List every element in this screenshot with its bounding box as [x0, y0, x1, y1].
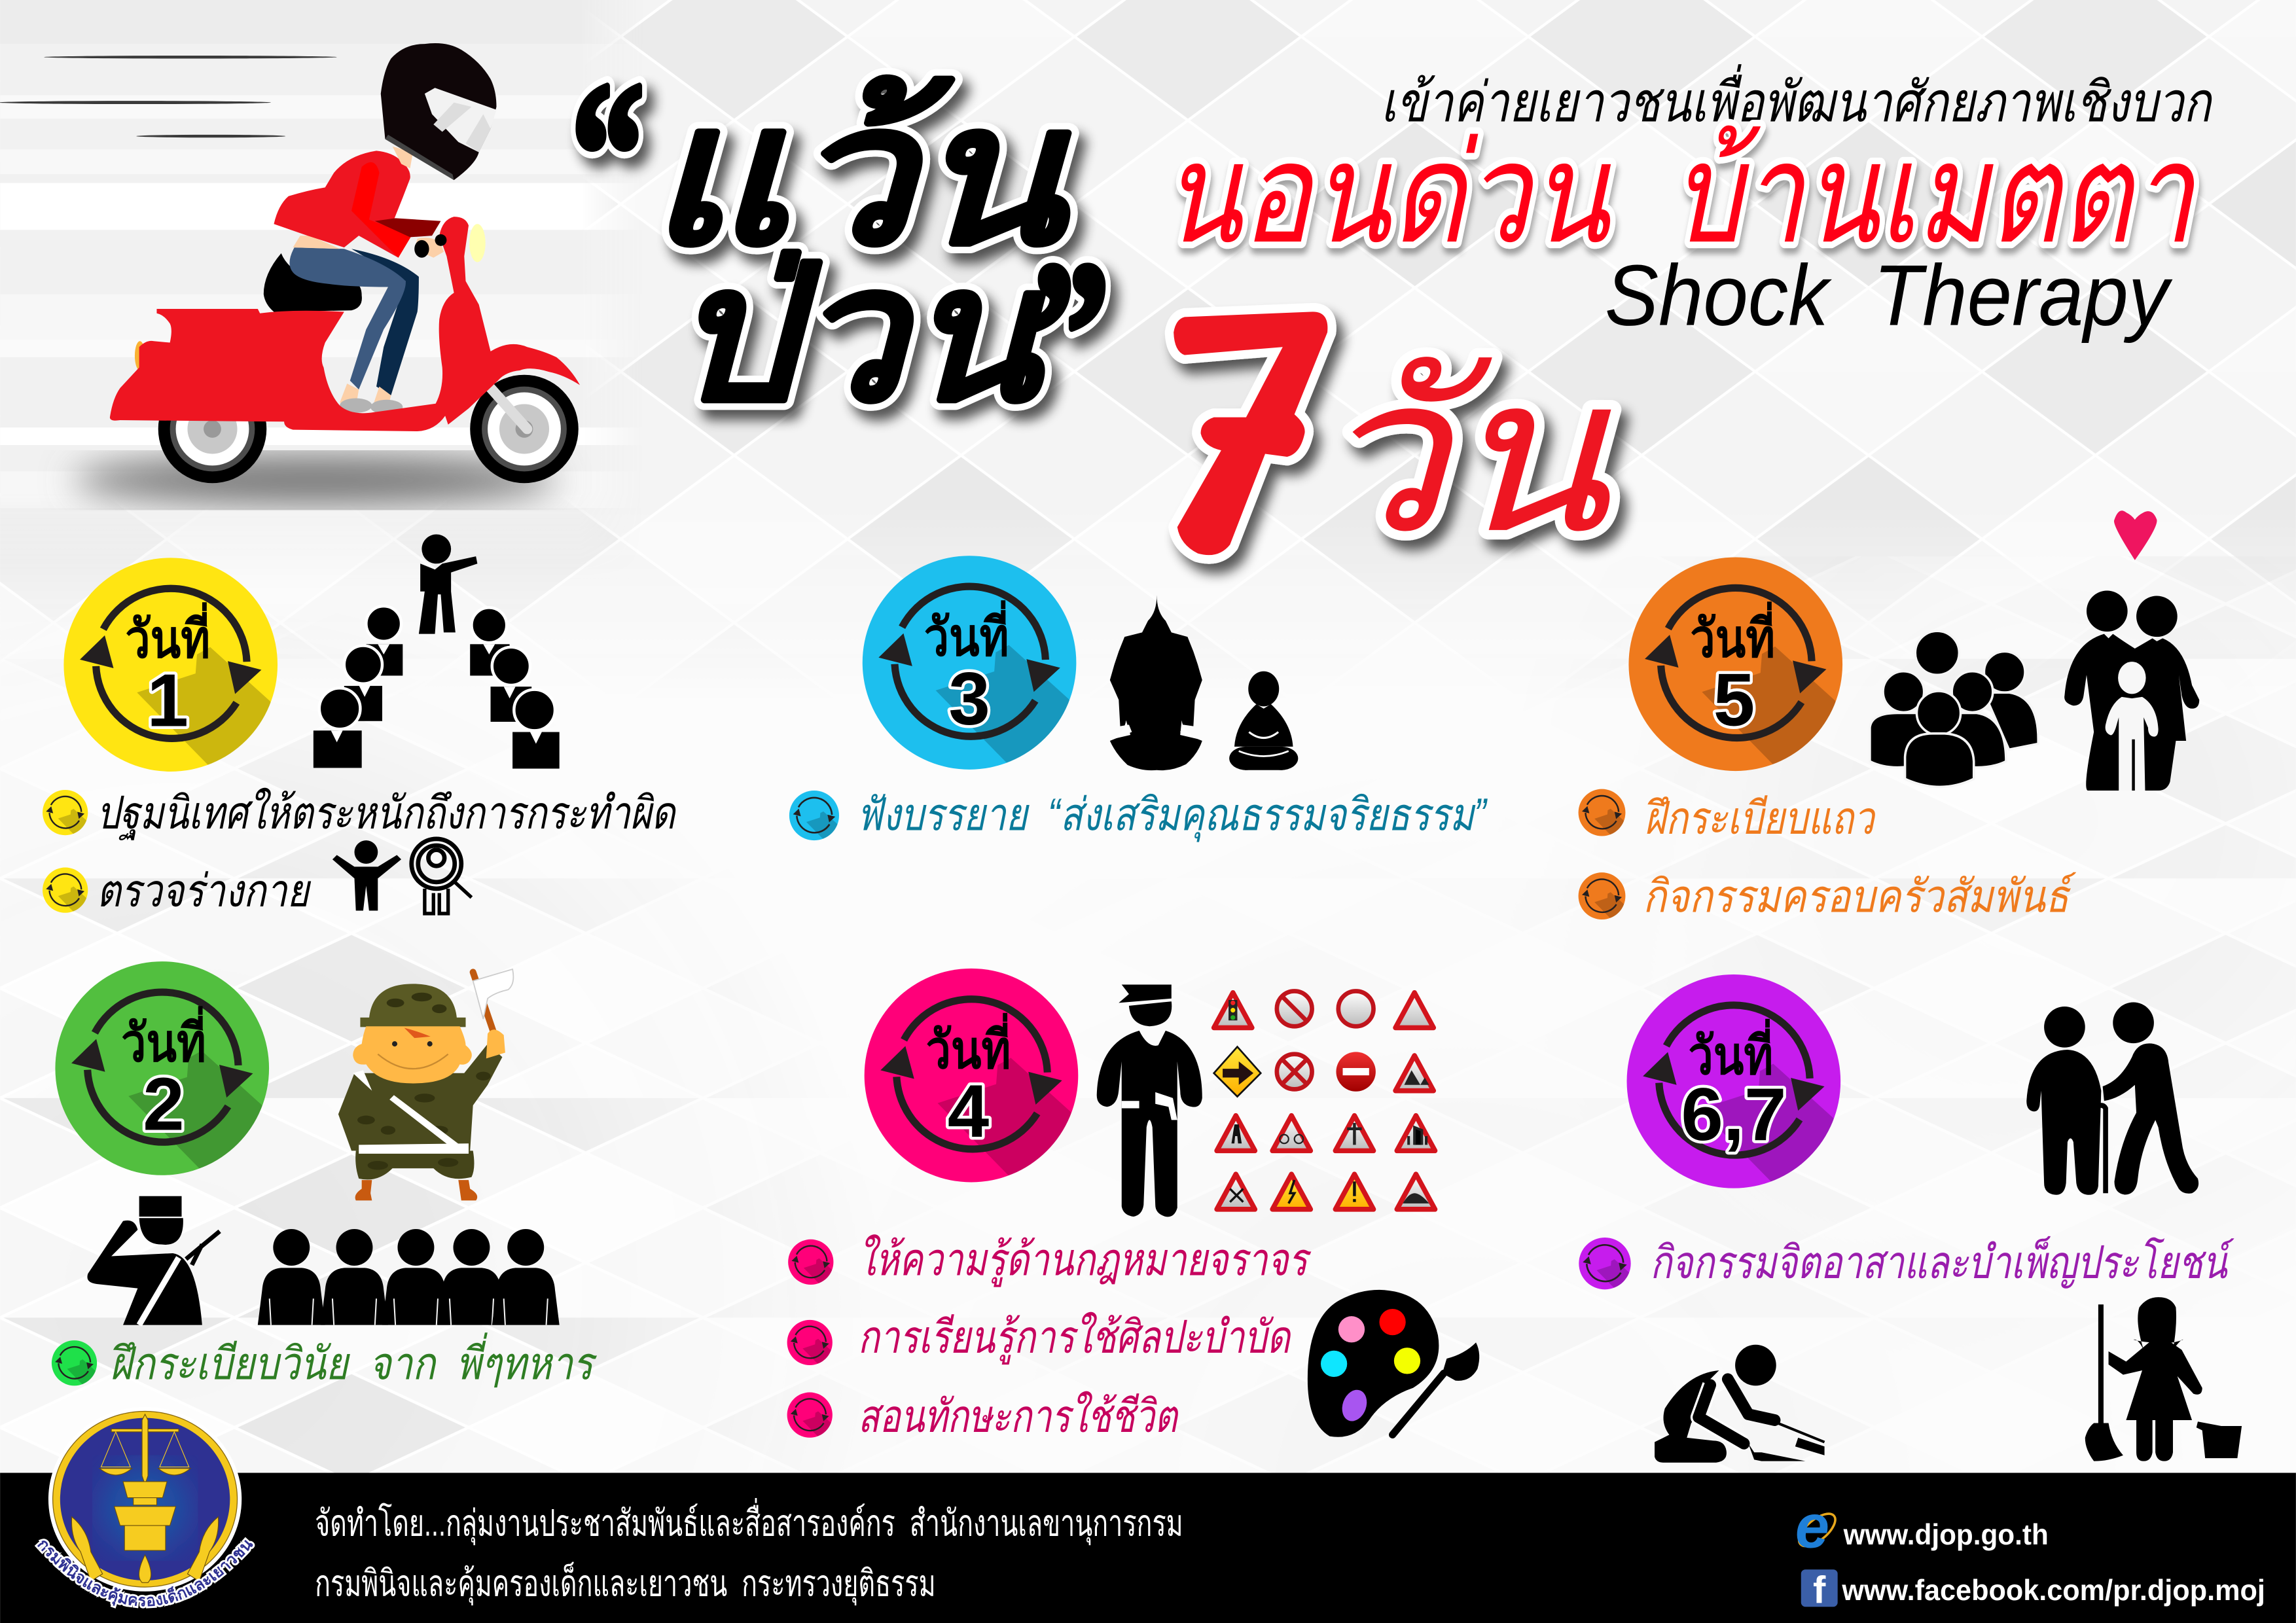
panel: day 2: [52, 961, 598, 1389]
icon: traffic police: [1097, 984, 1202, 1217]
badge day 4: 4: [948, 1070, 989, 1153]
badge day 4: [865, 969, 1088, 1182]
title: 7 วัน: [1174, 312, 1616, 577]
title: แว้น ป่วน: “: [571, 40, 644, 267]
text: organiser line 2: กรมพินิจและคุ้มครองเด็กและเยาวชน กระทรวงยุติธรรม: [315, 1561, 936, 1605]
icon: art palette and brush: [1308, 1290, 1479, 1437]
bullet: [789, 791, 842, 840]
icon: facebook: f: [1813, 1569, 1826, 1612]
title: แว้น ป่วน: ป่วน: [671, 228, 1047, 440]
badge day 5: [1628, 557, 1853, 771]
text: orientation: ปฐมนิเทศให้ตระหนักถึงการกระทำผิด: [97, 787, 677, 841]
text: organiser line 1: จัดทำโดย...กลุ่มงานประชาสัมพันธ์และสื่อสารองค์กร สำนักงานเลขานุการกรม: [315, 1498, 1183, 1546]
icon: person arms out: [332, 840, 401, 910]
icon: meditating figure: [1229, 671, 1298, 770]
badge day 3: [863, 556, 1086, 770]
badge day 3: วันที่: [924, 599, 1009, 667]
icon: rider on red scooter: [73, 43, 580, 505]
title: แว้น ป่วน: แว้น: [647, 65, 1072, 285]
title: แว้น ป่วน: [571, 40, 1110, 447]
icon: helping an elder: [2026, 1003, 2198, 1195]
title: แว้น ป่วน: แว้น: [647, 65, 1072, 285]
badge day 2: [55, 961, 279, 1175]
speed lines: [0, 56, 337, 137]
badge day 6,7: 6,7: [1681, 1073, 1786, 1156]
bullet: [1579, 1238, 1633, 1289]
icon: row of recruits: [258, 1229, 560, 1325]
icon: heart: [2114, 510, 2157, 560]
text: life skills: สอนทักษะการใช้ชีวิต: [858, 1391, 1179, 1442]
title: red programme name: นอนด่วน: [1162, 116, 1612, 272]
badge day 1: วันที่: [125, 601, 210, 669]
icon: grid of traffic signs: [1214, 991, 1435, 1209]
title: 7 วัน: วัน: [1315, 334, 1616, 577]
badge day 5: วันที่: [1690, 601, 1775, 669]
badge day 2: 2: [143, 1063, 185, 1146]
icon: facebook: [1801, 1569, 1838, 1612]
badge day 6,7: [1627, 974, 1851, 1188]
bullet: [1579, 872, 1628, 919]
title: แว้น ป่วน: ”: [1031, 220, 1110, 447]
text: seal caption: กรมพินิจและคุ้มครองเด็กและเยาวชน: [34, 1537, 255, 1609]
badge day 1: [63, 558, 288, 772]
badge day 1: 1: [147, 660, 188, 743]
icon: Buddha head: [1110, 595, 1202, 770]
panel: day 4: [787, 969, 1479, 1442]
icon: family: [2064, 590, 2199, 791]
icon: cartoon soldier with flag: [338, 969, 513, 1200]
bullet: [43, 868, 90, 913]
text: lecture: ฟังบรรยาย “ส่งเสริมคุณธรรมจริยธรรม”: [857, 789, 1488, 842]
text: website: www.djop.go.th: [1843, 1518, 2049, 1551]
bullet: [1579, 789, 1628, 836]
icon: kneeling sweeper: [1655, 1345, 1825, 1463]
badge day 4: วันที่: [926, 1012, 1011, 1080]
icon: magnifier on person: [412, 839, 471, 914]
logo: department seal: [34, 1411, 255, 1609]
icon: teacher with students: [314, 535, 560, 768]
text: body check: ตรวจร่างกาย: [97, 865, 312, 916]
text: facebook page: www.facebook.com/pr.djop.moj: [1841, 1574, 2265, 1607]
badge day 2: วันที่: [121, 1005, 206, 1073]
text: discipline: ฝึกระเบียบวินัย จาก พี่ๆทหาร: [110, 1332, 598, 1389]
panel: day 5: [1579, 510, 2199, 922]
title: แว้น ป่วน: ”: [1031, 220, 1110, 447]
title: red programme name: [1162, 116, 2197, 272]
bullet: [788, 1240, 836, 1285]
text: art therapy: การเรียนรู้การใช้ศิลปะบำบัด: [858, 1311, 1291, 1365]
icon: woman with mop and bucket: [2085, 1297, 2242, 1461]
panel: day 6,7: [1579, 974, 2242, 1463]
icon: browser: e: [1795, 1492, 1829, 1561]
icon: group of people: [1870, 631, 2038, 787]
text: drill: ฝึกระเบียบแถว: [1644, 793, 1876, 844]
panel: day 3: [789, 556, 1488, 842]
title: แว้น ป่วน: ป่วน: [671, 228, 1047, 440]
icon: saluting soldier: [87, 1196, 220, 1325]
bullet: [787, 1320, 834, 1365]
badge day 3: 3: [948, 657, 990, 740]
panel: day 1: [43, 535, 677, 916]
badge day 6,7: วันที่: [1688, 1018, 1773, 1086]
badge day 5: 5: [1713, 659, 1755, 742]
bullet: [43, 790, 90, 835]
title: Shock Therapy: Shock Therapy: [1605, 247, 2173, 344]
text: traffic law: ให้ความรู้ด้านกฎหมายจราจร: [858, 1234, 1312, 1288]
footer bar: [0, 1473, 2296, 1623]
title: แว้น ป่วน: “: [571, 40, 644, 267]
text: family relations: กิจกรรมครอบครัวสัมพันธ์: [1643, 871, 2076, 922]
bullet: [787, 1393, 834, 1438]
bullet: [52, 1340, 99, 1385]
